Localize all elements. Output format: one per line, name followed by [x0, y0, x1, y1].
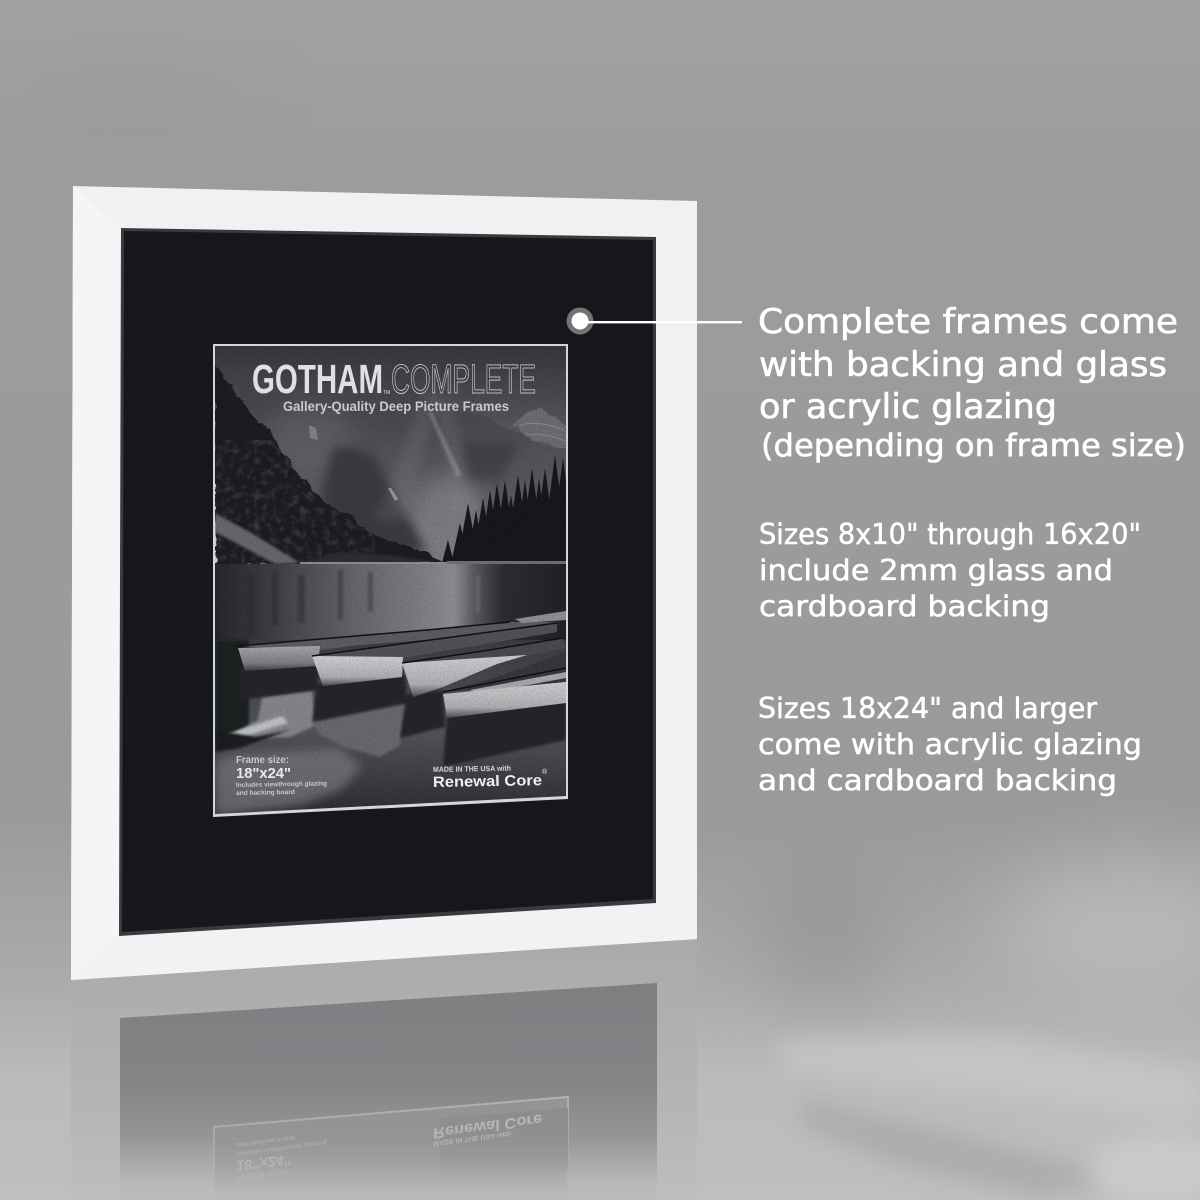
poster heading: and backing board — [236, 789, 295, 797]
canoes — [237, 622, 560, 650]
poster heading: ® — [542, 768, 548, 776]
reflected poster with mirrored text: Frame size: — [236, 1165, 289, 1183]
poster heading: Renewal Core — [433, 772, 542, 791]
reflected poster with mirrored text: Includes viewthrough glazing — [236, 1138, 327, 1157]
poster heading: Gallery-Quality Deep Picture Frames — [283, 398, 509, 414]
text block: sizes 8x10 through 16x20: include 2mm glass and — [759, 554, 1113, 587]
text block: complete frames: (depending on frame size) — [761, 428, 1186, 464]
callout marker and leader line — [566, 308, 742, 334]
frame rails — [71, 186, 697, 980]
text block: complete frames — [758, 302, 1186, 464]
text block: sizes 18x24 and larger: and cardboard backing — [758, 764, 1117, 797]
reflected poster with mirrored text: 18"x24" — [236, 1150, 291, 1174]
boat reflections — [240, 664, 566, 767]
text block: sizes 18x24 and larger: come with acrylic glazing — [758, 728, 1142, 761]
poster photograph: mountain lake with canoes — [215, 346, 577, 820]
text block: complete frames: or acrylic glazing — [759, 387, 1057, 427]
text block: sizes 18x24 and larger: Sizes 18x24" and larger — [758, 692, 1097, 725]
lake — [215, 564, 566, 640]
text block: complete frames: Complete frames come — [758, 302, 1178, 342]
text block: sizes 8x10 through 16x20: Sizes 8x10" through 16x20" — [759, 518, 1141, 551]
reflected poster with mirrored text — [213, 1096, 569, 1183]
frame reflection on the floor — [72, 983, 697, 1192]
text block: sizes 8x10 through 16x20 — [759, 518, 1141, 623]
text block: sizes 18x24 and larger — [758, 692, 1142, 797]
black mat board — [119, 228, 656, 936]
poster heading: TM — [383, 390, 390, 396]
reflected poster with mirrored text: and backing board — [236, 1134, 295, 1148]
poster heading: MADE IN THE USA with — [433, 764, 511, 774]
reflected mat — [120, 983, 657, 1200]
lower water — [215, 640, 566, 820]
poster heading — [236, 356, 548, 797]
photo grain — [215, 346, 566, 816]
poster — [213, 344, 577, 820]
background: grey studio wall and reflective floor — [0, 837, 1200, 1200]
reflected poster with mirrored text: MADE IN THE USA with — [433, 1129, 511, 1147]
poster heading: 18"x24" — [236, 765, 291, 782]
text block: complete frames: with backing and glass — [759, 345, 1167, 385]
white picture frame — [71, 186, 697, 980]
poster heading: GOTHAM — [252, 356, 383, 402]
poster labels: Frame size: — [236, 754, 289, 766]
pine trees — [442, 455, 577, 563]
poster heading: COMPLETE — [391, 356, 536, 402]
poster heading: Includes viewthrough glazing — [236, 780, 327, 789]
reflected poster with mirrored text: Renewal Core — [433, 1110, 542, 1142]
text block: sizes 8x10 through 16x20: cardboard backing — [759, 590, 1050, 623]
